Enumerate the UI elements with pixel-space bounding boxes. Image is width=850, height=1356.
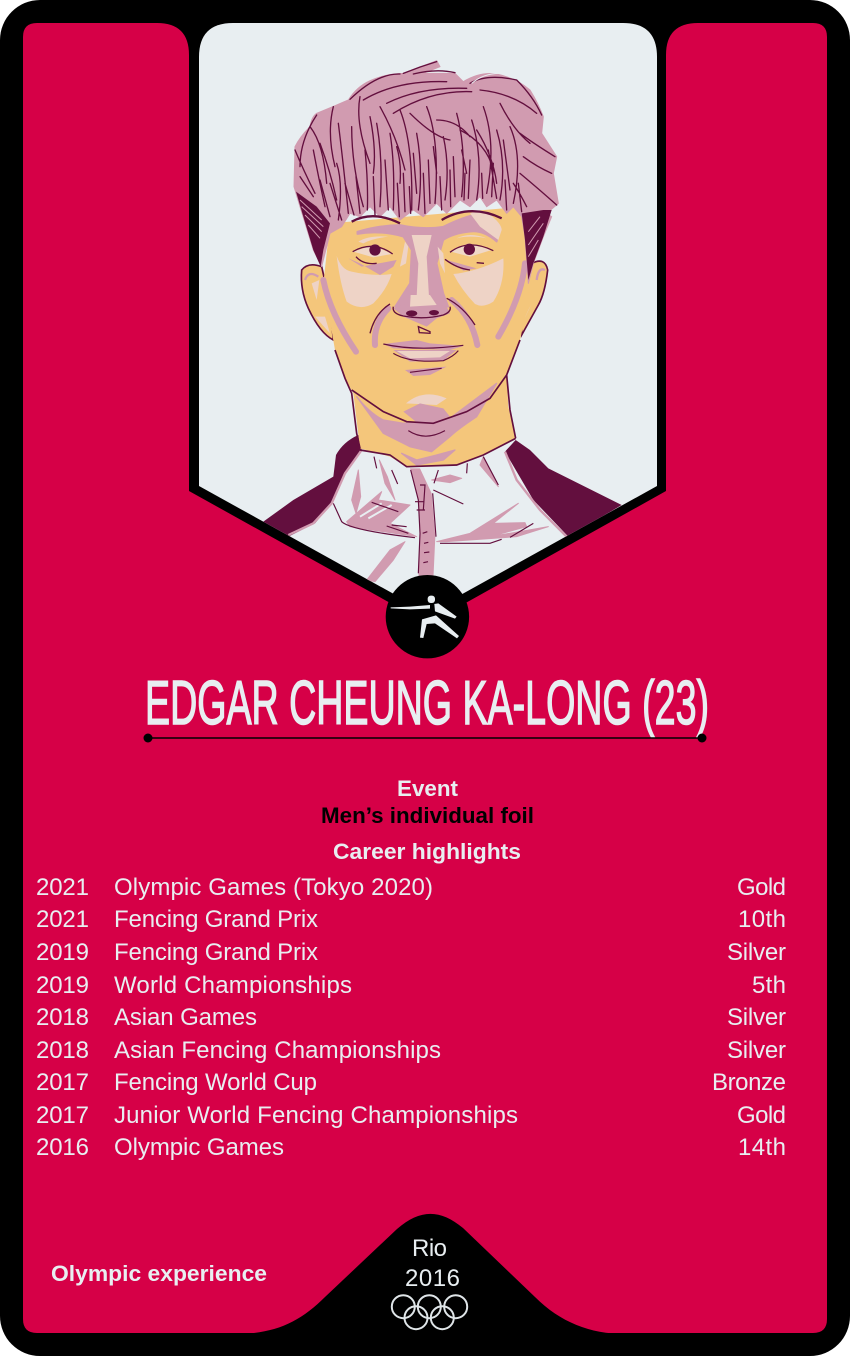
row 2018 Asian Fencing — [36, 1037, 786, 1064]
row 2018 Asian Fencing: Asian Fencing Championships — [114, 1037, 441, 1064]
name underline — [144, 734, 706, 742]
row 2021 Olympic Games: 2021 — [36, 874, 89, 901]
row 2019 Grand Prix: Fencing Grand Prix — [114, 939, 318, 966]
row 2021 Grand Prix — [36, 906, 786, 933]
row 2019 World Championships: World Championships — [114, 972, 352, 999]
row 2017 Junior — [36, 1102, 786, 1129]
row 2021 Olympic Games: Olympic Games (Tokyo 2020) — [114, 874, 433, 901]
row 2017 World Cup: 2017 — [36, 1069, 89, 1096]
row 2018 Asian Games — [36, 1004, 786, 1031]
row 2017 Junior: 2017 — [36, 1102, 89, 1129]
sport badge — [386, 575, 469, 658]
games city: Rio — [412, 1235, 447, 1262]
event heading: Event — [397, 776, 458, 801]
hair — [294, 61, 558, 283]
row 2021 Grand Prix: 2021 — [36, 906, 89, 933]
row 2017 Junior: Gold — [737, 1102, 786, 1129]
row 2018 Asian Fencing: 2018 — [36, 1037, 89, 1064]
row 2019 World Championships: 2019 — [36, 972, 89, 999]
row 2018 Asian Games: Asian Games — [114, 1004, 257, 1031]
icon: olympic rings — [392, 1295, 467, 1329]
row 2016 Olympic Games: Olympic Games — [114, 1134, 284, 1161]
games year: 2016 — [405, 1265, 460, 1292]
career highlights heading: Career highlights — [333, 839, 521, 864]
row 2017 World Cup — [36, 1069, 786, 1096]
olympic experience tab — [235, 1214, 625, 1334]
face — [294, 61, 558, 467]
row 2021 Grand Prix: 10th — [738, 906, 786, 933]
row 2018 Asian Games: 2018 — [36, 1004, 89, 1031]
row 2021 Olympic Games: Gold — [737, 874, 786, 901]
row 2021 Olympic Games — [36, 874, 786, 901]
row 2019 Grand Prix: 2019 — [36, 939, 89, 966]
row 2016 Olympic Games — [36, 1134, 786, 1161]
eyes — [353, 243, 493, 270]
icon: fencer — [391, 596, 459, 638]
row 2019 Grand Prix — [36, 939, 786, 966]
ears — [301, 261, 548, 340]
row 2018 Asian Games: Silver — [727, 1004, 786, 1031]
row 2019 World Championships: 5th — [752, 972, 786, 999]
eyebrows — [352, 211, 502, 223]
career highlights table — [36, 874, 786, 1161]
row 2017 World Cup: Fencing World Cup — [114, 1069, 317, 1096]
mouth, jaw and neck lines — [335, 340, 520, 467]
row 2018 Asian Fencing: Silver — [727, 1037, 786, 1064]
row 2017 Junior: Junior World Fencing Championships — [114, 1102, 518, 1129]
nose — [370, 295, 475, 333]
row 2019 World Championships — [36, 972, 786, 999]
row 2016 Olympic Games: 14th — [738, 1134, 786, 1161]
jacket — [263, 435, 622, 582]
row 2019 Grand Prix: Silver — [727, 939, 786, 966]
portrait illustration — [199, 23, 657, 623]
row 2021 Grand Prix: Fencing Grand Prix — [114, 906, 318, 933]
event name: Men’s individual foil — [321, 803, 534, 828]
row 2016 Olympic Games: 2016 — [36, 1134, 89, 1161]
olympic experience label: Olympic experience — [51, 1261, 267, 1286]
row 2017 World Cup: Bronze — [712, 1069, 786, 1096]
